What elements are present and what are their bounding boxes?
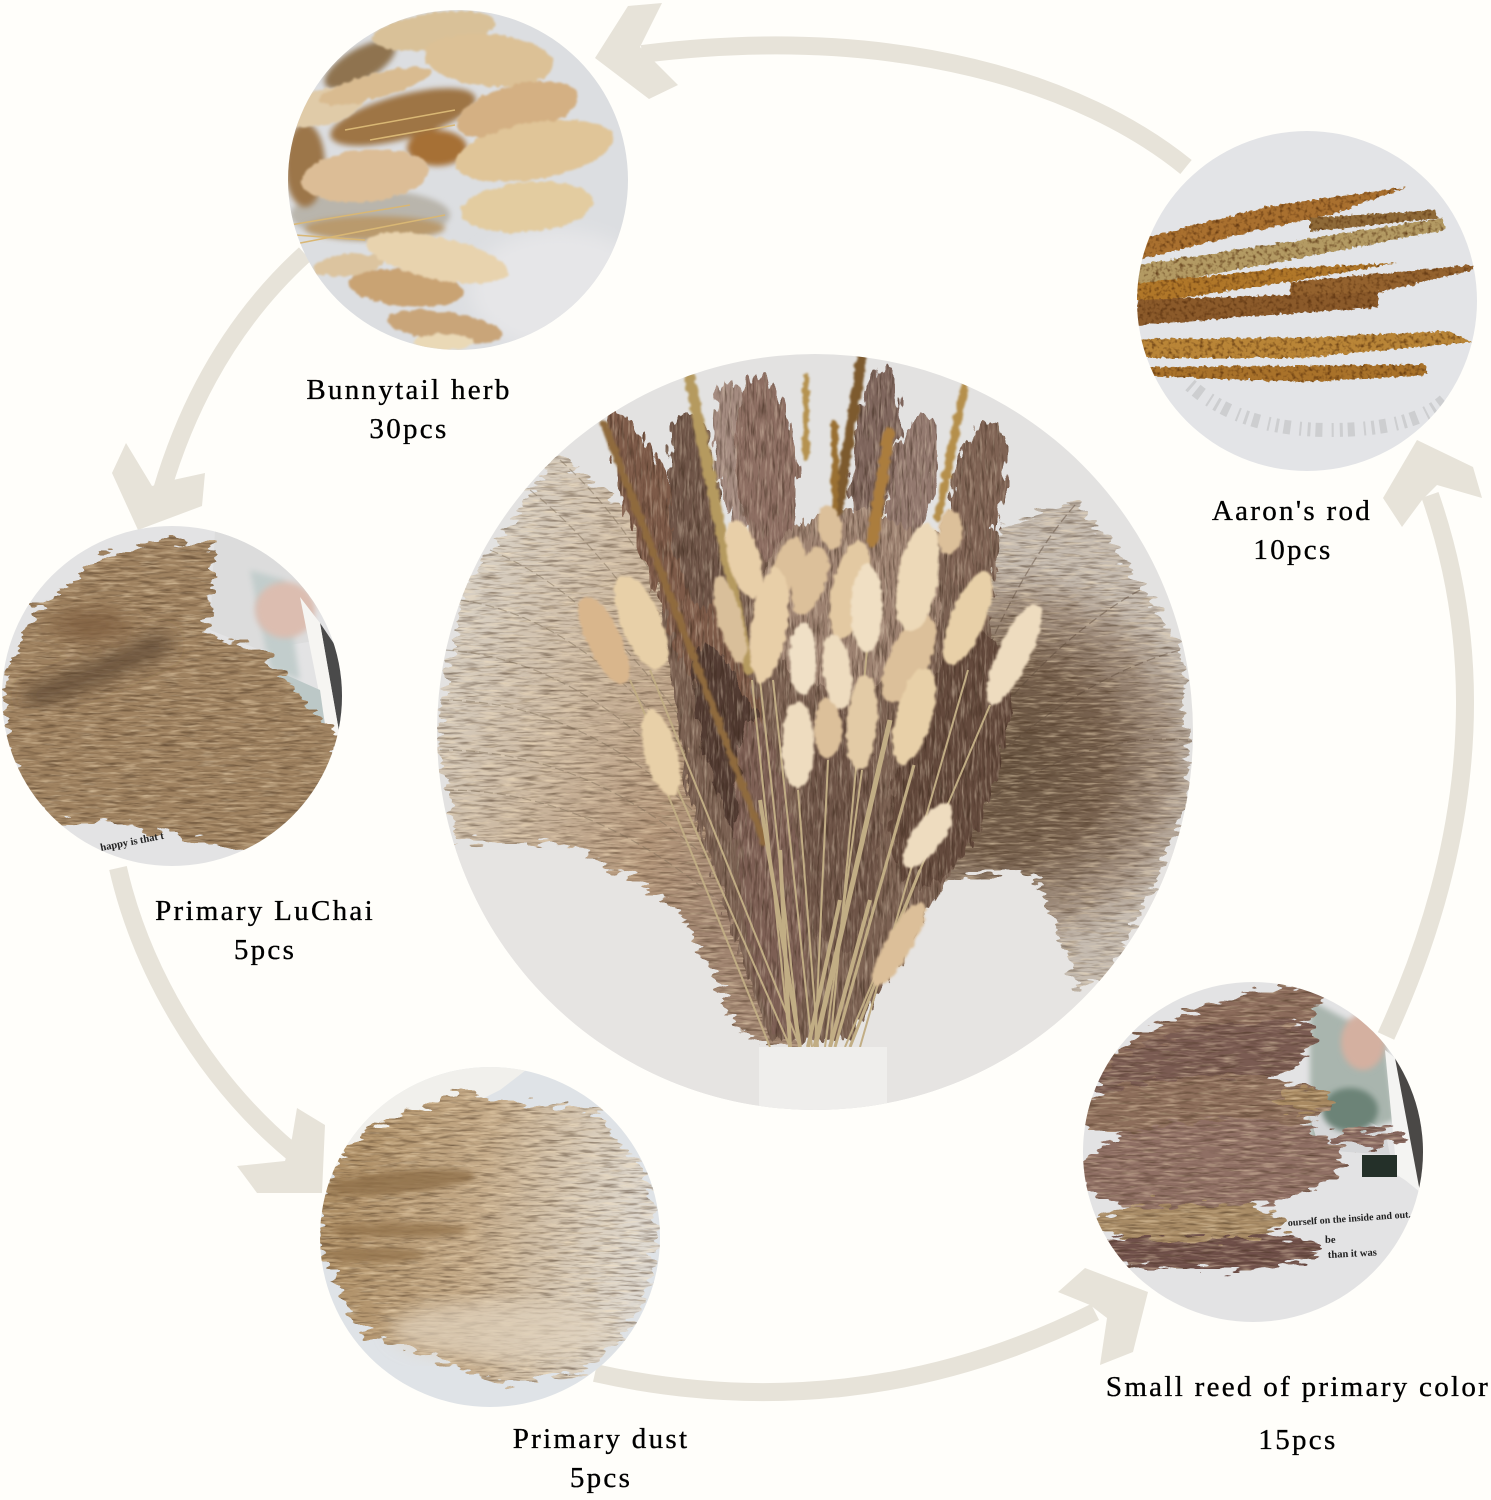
photo: Small reed of primary color xyxy=(1075,968,1430,1322)
mauve reeds xyxy=(585,363,1032,1042)
photo caption text: ourself on the inside and out. xyxy=(1287,1209,1412,1229)
label: Primary LuChai xyxy=(155,895,375,966)
stems xyxy=(630,650,990,1047)
label: Aaron's rod xyxy=(1212,495,1372,566)
label: Primary dust: Primary dust xyxy=(513,1423,689,1455)
photo caption text xyxy=(1288,1212,1410,1258)
label: Bunnytail herb: Bunnytail herb xyxy=(306,374,512,406)
label: Aaron's rod: Aaron's rod xyxy=(1212,495,1372,527)
vase xyxy=(759,1047,887,1117)
arrow: Primary dust to Small reed xyxy=(595,1268,1148,1392)
label: Primary dust: 5pcs xyxy=(570,1462,632,1494)
label: Bunnytail herb: 30pcs xyxy=(369,413,449,445)
label: Small reed of primary color xyxy=(1106,1371,1490,1456)
photo: Primary LuChai xyxy=(2,526,345,866)
photo caption text: than it was xyxy=(1328,1247,1377,1261)
golden spikes xyxy=(604,357,965,841)
arrow: Aaron's rod to Bunnytail herb xyxy=(595,3,1186,167)
photo caption text: be xyxy=(1325,1235,1336,1246)
label: Small reed of primary color: 15pcs xyxy=(1258,1424,1338,1456)
photo: full bouquet (centre circle) xyxy=(430,350,1200,1120)
left pale reed fan xyxy=(437,453,800,1047)
label: Primary LuChai: 5pcs xyxy=(234,934,296,966)
label: Small reed of primary color: Small reed of primary color xyxy=(1106,1371,1490,1403)
label: Primary LuChai: Primary LuChai xyxy=(155,895,375,927)
photo: Aaron's rod xyxy=(1137,131,1477,471)
arrow: Primary LuChai to Primary dust xyxy=(118,868,325,1193)
label: Aaron's rod: 10pcs xyxy=(1253,534,1333,566)
label: Primary dust xyxy=(513,1423,689,1494)
photo: Primary dust xyxy=(320,1067,660,1407)
arrow: Small reed to Aaron's rod xyxy=(1383,440,1482,1036)
photo caption text: happy is that t xyxy=(99,831,165,854)
label: Bunnytail herb xyxy=(306,374,512,445)
photo: Bunnytail herb xyxy=(281,5,650,350)
bunny tails xyxy=(568,504,1052,992)
arrow: Bunnytail herb to Primary LuChai xyxy=(112,254,305,530)
right brown reed fan xyxy=(840,502,1191,1037)
